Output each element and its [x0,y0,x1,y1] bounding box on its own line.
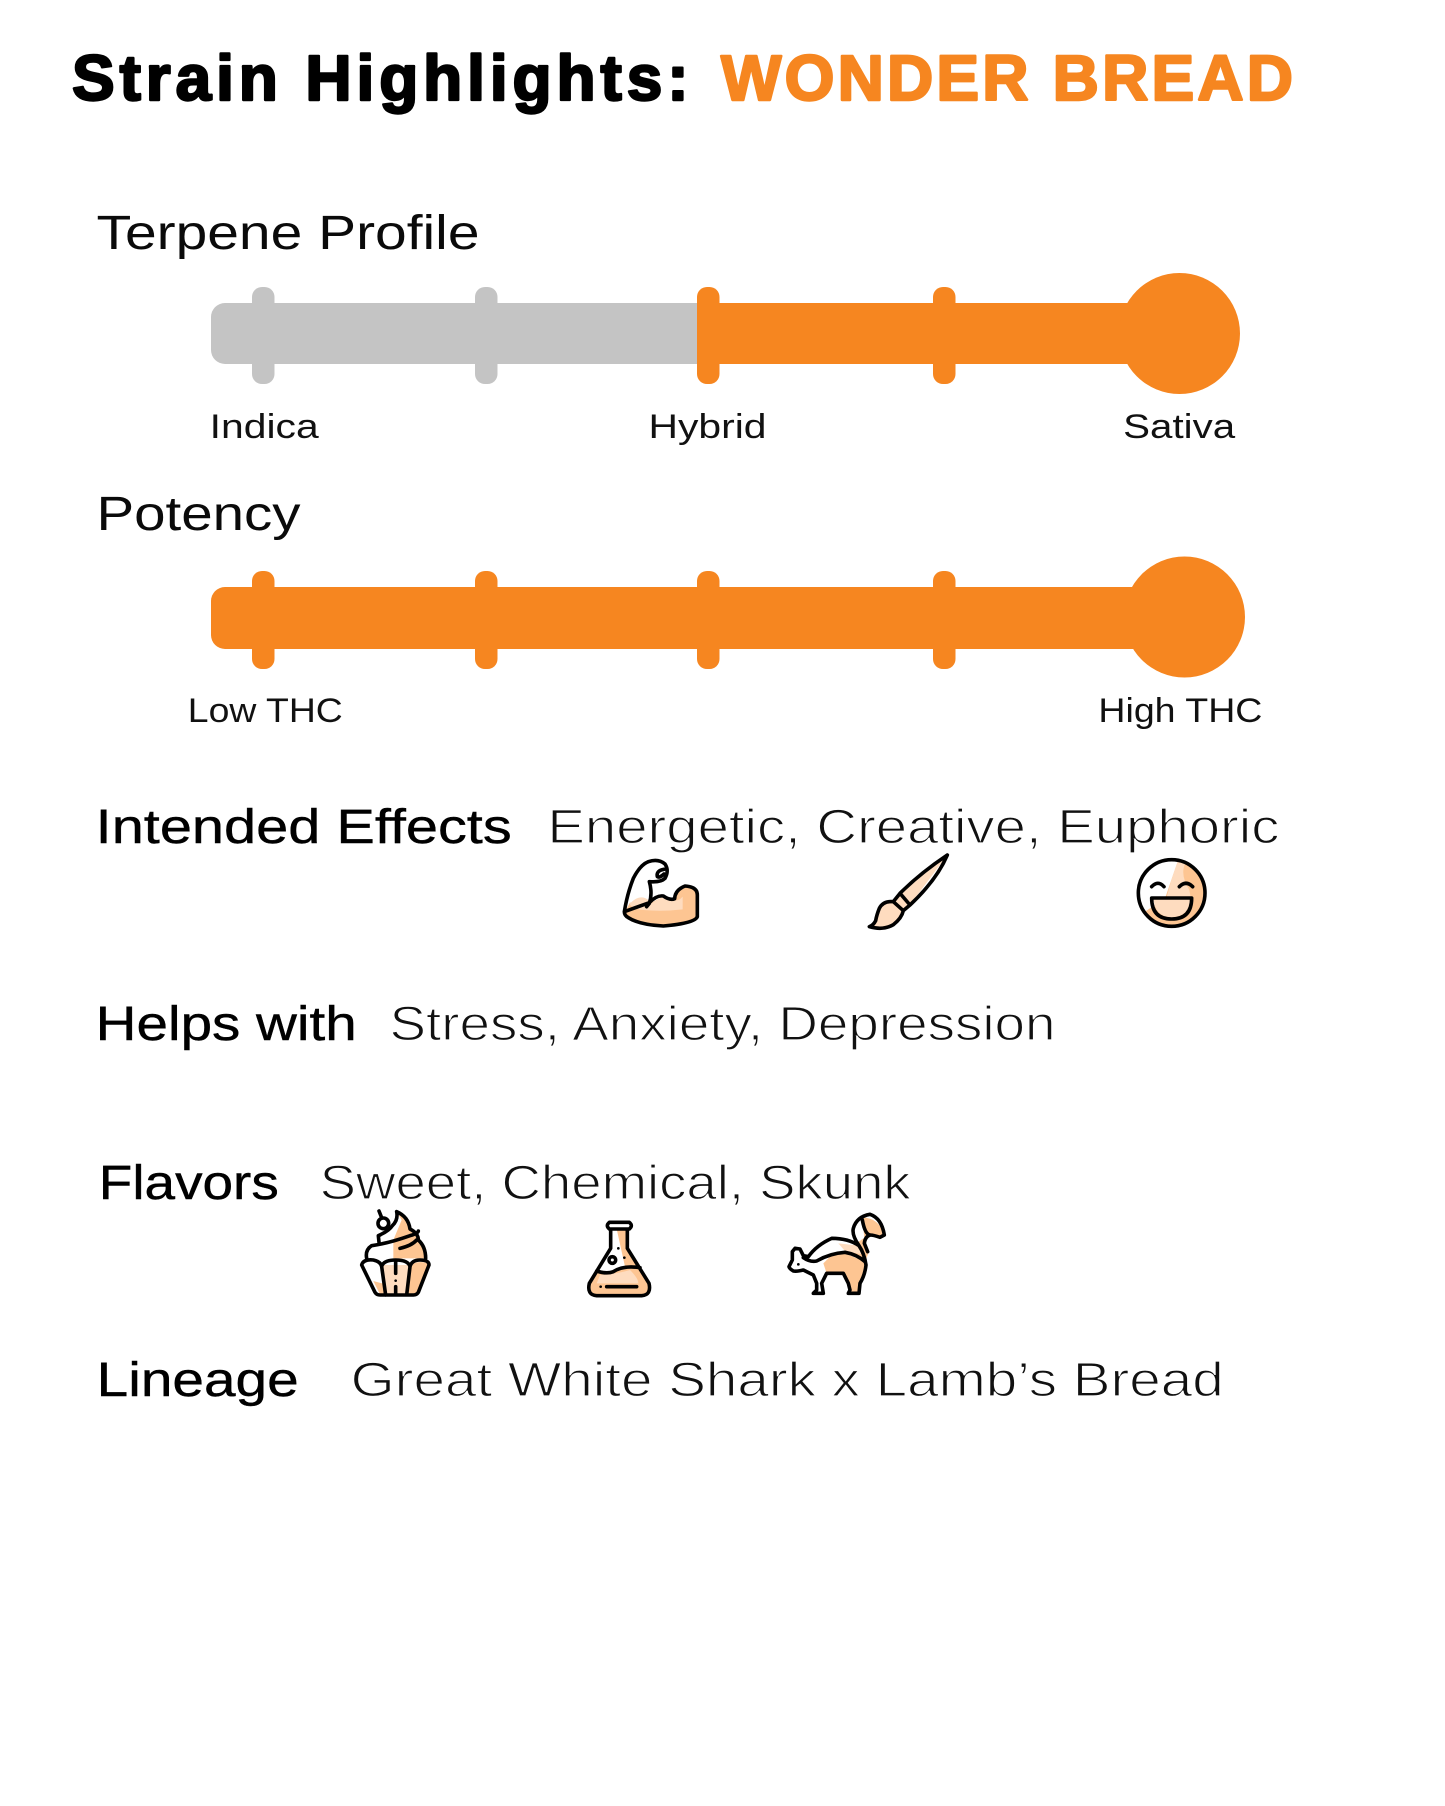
panel: flavors [99,1157,912,1296]
heading: terpene profile: Terpene Profile [96,207,480,260]
title [72,42,1293,114]
icon: skunk [789,1214,884,1293]
label: flavors: Flavors [99,1157,279,1210]
slider labels: terpene [210,408,1235,446]
icon: cupcake [362,1211,429,1295]
panel: lineage [97,1354,1224,1407]
panel: intended effects [96,801,1279,929]
icon: flask [589,1222,650,1296]
panel: terpene profile [96,207,1240,446]
slider labels: terpene: Hybrid [648,408,766,446]
panel: helps with [96,998,1055,1051]
label: lineage: Lineage [97,1354,299,1407]
panel: potency [96,488,1262,730]
slider labels: potency: Low THC [188,692,343,730]
values: lineage: Great White Shark x Lamb’s Bread [351,1354,1224,1407]
values: flavors: Sweet, Chemical, Skunk [320,1157,912,1210]
slider labels: terpene: Indica [210,408,319,446]
icon: flexed muscle [624,860,697,926]
label: intended effects: Intended Effects [96,801,512,854]
title: WONDER BREAD [721,42,1293,114]
slider labels: terpene: Sativa [1123,408,1235,446]
icon: laughing face [1138,860,1206,926]
icon: paint brush [869,855,947,929]
slider labels: potency [188,692,1262,730]
slider: terpene profile [211,273,1240,394]
heading: potency: Potency [96,488,300,541]
title: Strain Highlights: [72,42,688,114]
slider labels: potency: High THC [1098,692,1262,730]
label: helps with: Helps with [96,998,357,1051]
values: helps with: Stress, Anxiety, Depression [390,998,1056,1051]
slider: potency [211,556,1245,678]
values: effects: Energetic, Creative, Euphoric [547,801,1279,854]
